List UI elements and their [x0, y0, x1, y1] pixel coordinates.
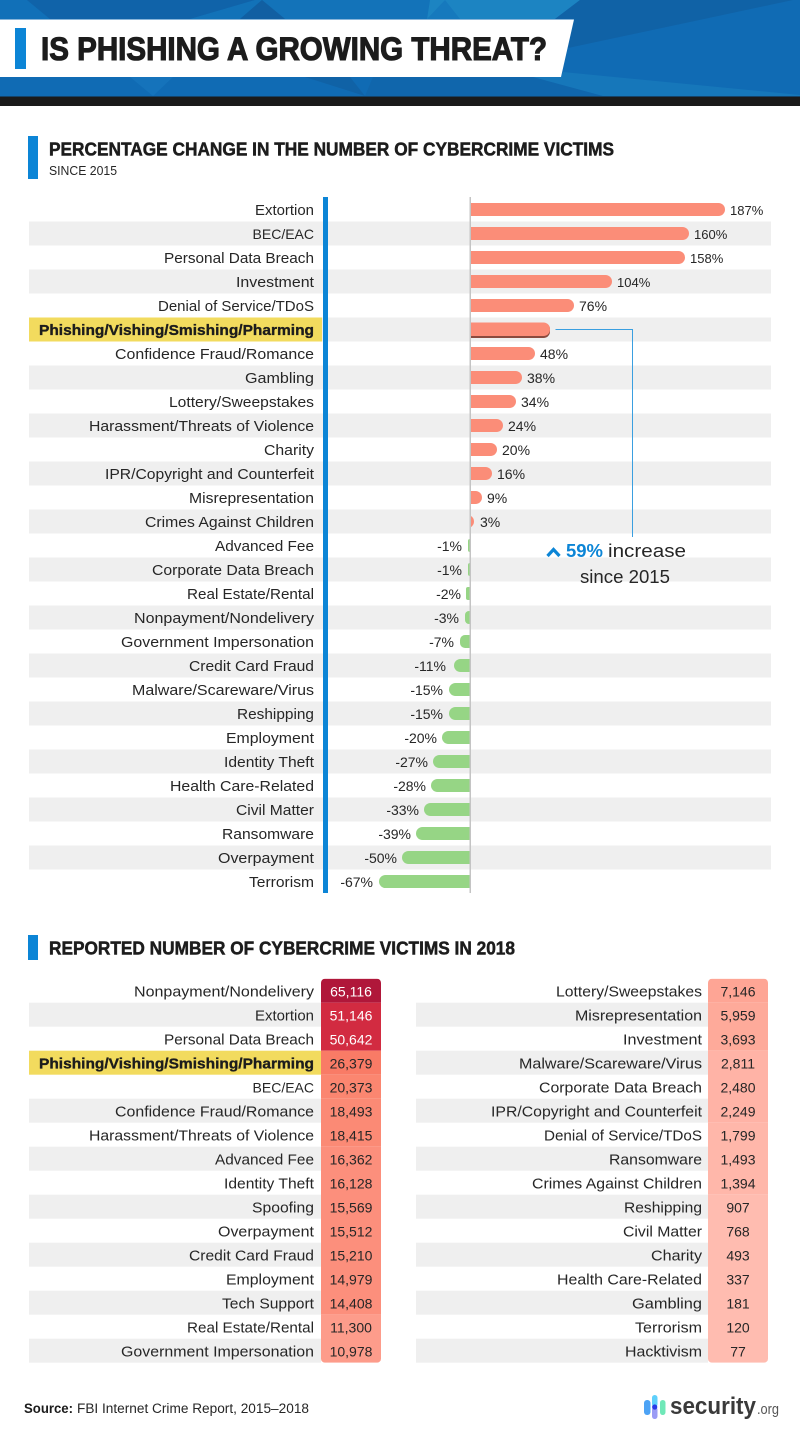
table: victims left column: Advanced Fee	[215, 1152, 314, 1168]
chart row labels: Reshipping	[237, 706, 314, 723]
table: victims left column: 10,978	[330, 1344, 373, 1360]
chart value labels: -3%	[434, 610, 459, 626]
table: victims right column: Misrepresentation	[575, 1008, 702, 1024]
chart value labels: -20%	[404, 730, 437, 746]
chart value labels: 34%	[521, 394, 549, 410]
chart row labels: IPR/Copyright and Counterfeit	[105, 466, 315, 483]
chart value labels: -67%	[340, 874, 373, 890]
table: victims left column: 18,493	[330, 1104, 373, 1120]
table: victims right column: 3,693	[720, 1032, 756, 1048]
chart value labels: 158%	[690, 251, 724, 266]
chart row labels: Denial of Service/TDoS	[158, 298, 314, 315]
table: victims right column: Malware/Scareware/Virus	[519, 1056, 702, 1072]
table: victims left column: 15,512	[330, 1224, 373, 1240]
source note: Source:	[24, 1401, 73, 1416]
header banner	[0, 0, 800, 106]
chart row labels: Confidence Fraud/Romance	[115, 346, 314, 363]
chart value labels: 160%	[694, 227, 728, 242]
table: victims right column: 5,959	[720, 1008, 756, 1024]
bar chart: percentage change since 2015	[29, 197, 771, 893]
table: victims left column: 16,128	[330, 1176, 373, 1192]
table: victims right column: Investment	[623, 1032, 703, 1048]
chart row labels: Crimes Against Children	[145, 514, 314, 531]
chart value labels: -7%	[429, 634, 454, 650]
table: victims right column: Terrorism	[635, 1320, 702, 1336]
chart value labels: -15%	[410, 706, 443, 722]
chart row labels: Identity Theft	[224, 754, 315, 771]
table: victims left column: 15,210	[330, 1248, 373, 1264]
table: victims right column: 181	[726, 1296, 750, 1312]
callout: 59% increase: 59%	[566, 541, 603, 561]
table: victims left column: Harassment/Threats of Violence	[89, 1128, 314, 1144]
table: victims left column: 15,569	[330, 1200, 373, 1216]
chart value labels: -15%	[410, 682, 443, 698]
chart row labels: BEC/EAC	[253, 226, 314, 242]
table: victims right column: IPR/Copyright and Counterfeit	[491, 1104, 703, 1120]
chart row labels: Corporate Data Breach	[152, 562, 314, 579]
table: victims left column: Confidence Fraud/Romance	[115, 1104, 314, 1120]
table: victims left column: Phishing/Vishing/Smishing/Pharming	[39, 1056, 314, 1072]
chart row labels: Gambling	[245, 370, 314, 387]
table: victims right column: 1,493	[720, 1152, 756, 1168]
chart row labels: Harassment/Threats of Violence	[89, 418, 314, 435]
chart value labels: 24%	[508, 418, 536, 434]
callout: 59% increase	[548, 330, 686, 587]
chart row labels: Personal Data Breach	[164, 250, 314, 267]
table: victims right column: 2,249	[720, 1104, 756, 1120]
table: victims right column: 907	[726, 1200, 750, 1216]
logo: security.org: .org	[757, 1401, 779, 1418]
chart value labels: 187%	[730, 203, 764, 218]
table: victims right column: Lottery/Sweepstakes	[556, 984, 702, 1000]
table: victims left column: Government Impersonation	[121, 1344, 314, 1360]
table: victims left column: 26,379	[330, 1056, 373, 1072]
chart row labels: Credit Card Fraud	[189, 658, 314, 675]
table: victims right column: Crimes Against Children	[532, 1176, 702, 1192]
chart row labels: Employment	[226, 730, 315, 747]
table: victims left column: 20,373	[330, 1080, 373, 1096]
chart value labels: -39%	[378, 826, 411, 842]
table: victims right column: Gambling	[632, 1296, 702, 1312]
chart row labels: Real Estate/Rental	[187, 586, 314, 603]
chart row labels: Phishing/Vishing/Smishing/Pharming	[39, 322, 314, 339]
chart row labels: Malware/Scareware/Virus	[132, 682, 314, 699]
chart value labels: 38%	[527, 370, 555, 386]
chart value labels	[340, 203, 764, 890]
table: victims left column: Tech Support	[222, 1296, 315, 1312]
chart value labels: -1%	[437, 562, 462, 578]
chart value labels: 3%	[480, 514, 500, 530]
table: victims right column: 1,394	[720, 1176, 756, 1192]
chart row labels: Misrepresentation	[189, 490, 314, 507]
callout: 59% increase: increase	[608, 541, 686, 561]
chart row labels: Extortion	[255, 202, 314, 219]
table: victims left column: 51,146	[330, 1008, 373, 1024]
table: victims left column: 18,415	[330, 1128, 373, 1144]
table: victims right column: 77	[730, 1344, 746, 1360]
table: victims right column: 120	[726, 1320, 750, 1336]
source note: FBI Internet Crime Report, 2015–2018	[77, 1401, 309, 1416]
table: victims right column: Corporate Data Breach	[539, 1080, 702, 1096]
chart value labels: -1%	[437, 538, 462, 554]
table: victims left column: 50,642	[330, 1032, 373, 1048]
table: victims right column: Health Care-Related	[557, 1272, 702, 1288]
chart row labels: Nonpayment/Nondelivery	[134, 610, 315, 627]
chart value labels: -2%	[436, 586, 461, 602]
chart row labels: Health Care-Related	[170, 778, 314, 795]
chart row labels: Ransomware	[222, 826, 314, 843]
chart row labels: Lottery/Sweepstakes	[169, 394, 314, 411]
chart row labels	[39, 202, 315, 891]
chart value labels: 48%	[540, 346, 568, 362]
table: victims left column: 14,408	[330, 1296, 373, 1312]
table: victims right column: 2,811	[721, 1056, 755, 1072]
callout: 59% increase: since 2015	[580, 567, 670, 587]
chart row labels: Overpayment	[218, 850, 315, 867]
heading: reported victims 2018: REPORTED NUMBER OF CYBERCRIME VICTIMS IN 2018	[49, 938, 515, 958]
title banner: IS PHISHING A GROWING THREAT?	[41, 31, 547, 67]
chart value labels: 16%	[497, 466, 525, 482]
table: victims left column: 65,116	[330, 984, 372, 1000]
table: victims right column: Ransomware	[609, 1152, 702, 1168]
table: victims left column: 16,362	[330, 1152, 373, 1168]
chart value labels: 104%	[617, 275, 651, 290]
chart value labels: -11%	[414, 658, 446, 674]
table: victims right column	[416, 979, 768, 1363]
table: victims left column: 14,979	[330, 1272, 373, 1288]
table: victims left column: BEC/EAC	[253, 1080, 314, 1096]
chart value labels: 20%	[502, 442, 530, 458]
table: victims left column: Extortion	[255, 1008, 314, 1024]
table: victims right column: 7,146	[720, 984, 756, 1000]
table: victims right column: 337	[726, 1272, 750, 1288]
chart value labels: 76%	[579, 298, 607, 314]
table: victims right column: 493	[726, 1248, 750, 1264]
chart row labels: Government Impersonation	[121, 634, 314, 651]
chart row labels: Advanced Fee	[215, 538, 314, 555]
chart value labels: 9%	[487, 490, 507, 506]
table: victims left column: Overpayment	[218, 1224, 315, 1240]
chart value labels: -33%	[386, 802, 419, 818]
table: victims left column: 11,300	[330, 1320, 372, 1336]
table: victims right column: 768	[726, 1224, 750, 1240]
chart value labels: -27%	[395, 754, 428, 770]
logo: security.org: security	[670, 1393, 757, 1420]
table: victims right column: Civil Matter	[623, 1224, 702, 1240]
table: victims right column: Charity	[651, 1248, 703, 1264]
logo: security.org	[644, 1393, 779, 1420]
chart row labels: Charity	[264, 442, 315, 459]
chart value labels: -50%	[364, 850, 397, 866]
chart row labels: Investment	[236, 274, 315, 291]
table: victims right column: 2,480	[720, 1080, 756, 1096]
table: victims left column: Real Estate/Rental	[187, 1320, 314, 1336]
heading: percentage change	[28, 136, 614, 179]
table: victims right column: 1,799	[720, 1128, 756, 1144]
heading: percentage change: SINCE 2015	[49, 163, 117, 178]
table: victims left column: Credit Card Fraud	[189, 1248, 314, 1264]
chart row labels: Terrorism	[249, 874, 314, 891]
title banner	[0, 20, 574, 77]
table: victims left column	[29, 979, 381, 1363]
table: victims left column: Identity Theft	[224, 1176, 315, 1192]
table: victims right column: Hacktivism	[625, 1344, 702, 1360]
chart row labels: Civil Matter	[236, 802, 314, 819]
heading: percentage change: PERCENTAGE CHANGE IN THE NUMBER OF CYBERCRIME VICTIMS	[49, 140, 614, 160]
table: victims right column: Reshipping	[624, 1200, 702, 1216]
chart value labels: -28%	[393, 778, 426, 794]
table: victims left column: Personal Data Breach	[164, 1032, 314, 1048]
table: victims left column: Employment	[226, 1272, 315, 1288]
table: victims left column: Spoofing	[252, 1200, 314, 1216]
table: victims left column: Nonpayment/Nondelivery	[134, 984, 315, 1000]
table: victims right column: Denial of Service/TDoS	[544, 1128, 702, 1144]
